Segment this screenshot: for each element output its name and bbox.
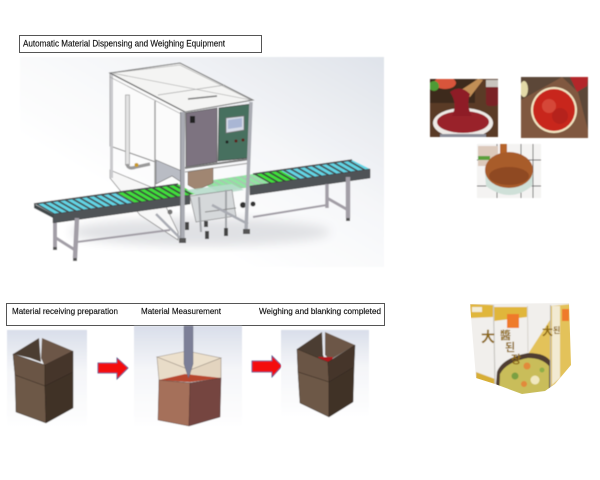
arrow: step 2 to 3 — [252, 356, 282, 377]
arrow: step 1 to 2 — [98, 358, 128, 379]
photo: sauce spooned into bowl — [429, 77, 498, 138]
dispensing nozzle — [184, 326, 193, 378]
panel: empty carton — [7, 330, 87, 429]
panel: sauce photos — [429, 77, 588, 198]
title box: Automatic Material Dispensing and Weighing Equipment — [23, 38, 225, 48]
left conveyor section — [34, 184, 196, 223]
machine body — [110, 63, 253, 240]
steps header box — [6, 304, 384, 326]
box lettering: 된 — [553, 325, 560, 335]
step label 2: Material Measurement — [141, 306, 222, 316]
box lettering: 된 — [505, 341, 515, 354]
box lettering: 大 — [481, 329, 495, 345]
box lettering: 장 — [511, 353, 521, 366]
panel: packaged product box — [468, 302, 572, 396]
scale platform — [168, 184, 256, 239]
box lettering: 大 — [542, 324, 553, 338]
soup bowl illustration — [495, 353, 551, 396]
right conveyor section — [200, 160, 370, 195]
front panels — [185, 104, 251, 172]
carton on scale — [188, 168, 213, 190]
photo: bean paste bowl — [477, 144, 541, 198]
conveyor legs left — [53, 218, 170, 261]
title box — [20, 36, 262, 52]
step label 1: Material receiving preparation — [12, 306, 118, 316]
machine posts — [156, 102, 251, 243]
panel: equipment rendering — [20, 57, 384, 267]
conveyor legs right — [253, 177, 350, 221]
step label 3: Weighing and blanking completed — [259, 306, 381, 316]
panel: filled carton — [281, 330, 369, 419]
panel: filling carton — [134, 326, 242, 430]
floor shadow — [70, 218, 330, 246]
box lettering: 醬 — [500, 328, 511, 342]
photo: chili sauce in round bowl — [520, 77, 588, 138]
